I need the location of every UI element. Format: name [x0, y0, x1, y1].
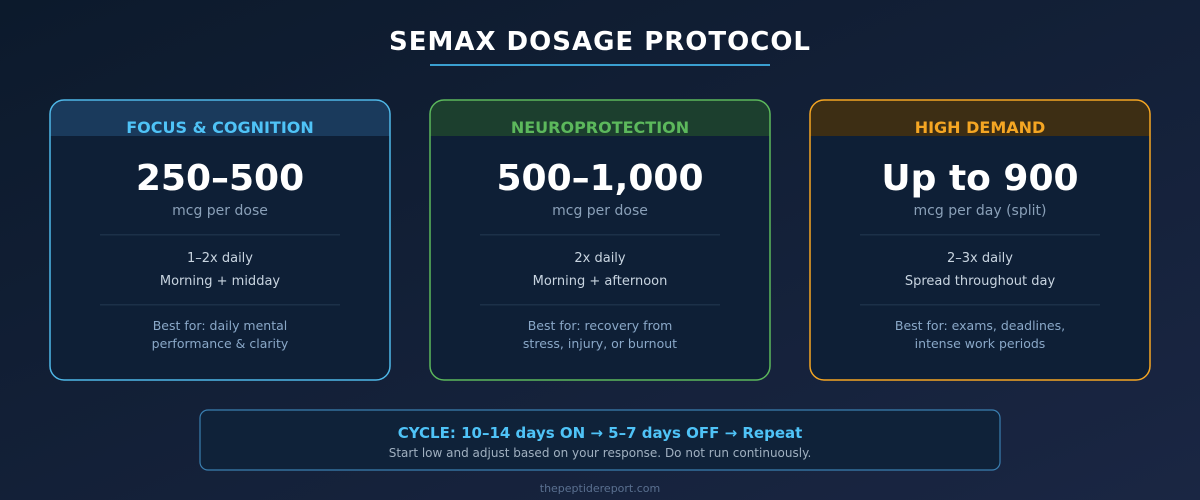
callout: cycle: CYCLE: 10–14 days ON → 5–7 days OFF → Repeat — [398, 424, 802, 442]
panel: neuroprotection: mcg per dose — [552, 203, 648, 219]
panel: neuroprotection: NEUROPROTECTION — [511, 118, 689, 137]
panel: focus & cognition: Morning + midday — [160, 274, 280, 289]
panel: focus & cognition — [50, 100, 390, 380]
panel: high demand: Up to 900 — [881, 158, 1079, 199]
panel: neuroprotection — [430, 100, 770, 380]
panel: neuroprotection: Morning + afternoon — [533, 274, 667, 289]
footer: thepeptidereport.com — [540, 482, 660, 495]
panel: focus & cognition: 1–2x daily — [187, 251, 253, 266]
panel: high demand: 2–3x daily — [947, 251, 1013, 266]
panel: high demand: mcg per day (split) — [914, 203, 1046, 219]
panel: focus & cognition: 250–500 — [136, 158, 304, 199]
panel: neuroprotection: stress, injury, or burnout — [523, 336, 677, 351]
panel: high demand: Spread throughout day — [905, 274, 1055, 289]
panel: neuroprotection: 500–1,000 — [496, 158, 704, 199]
callout: cycle: Start low and adjust based on your response. Do not run continuously. — [389, 446, 811, 460]
panel: focus & cognition: mcg per dose — [172, 203, 268, 219]
panel: neuroprotection: 2x daily — [574, 251, 626, 266]
callout: cycle — [200, 410, 1000, 470]
panel: focus & cognition: FOCUS & COGNITION — [126, 118, 314, 137]
title: SEMAX DOSAGE PROTOCOL — [389, 27, 811, 57]
panel: high demand — [810, 100, 1150, 380]
panel: high demand: Best for: exams, deadlines, — [895, 318, 1065, 333]
panel: high demand: HIGH DEMAND — [915, 118, 1045, 137]
panel: focus & cognition: Best for: daily mental — [153, 318, 287, 333]
panel: neuroprotection: Best for: recovery from — [528, 318, 672, 333]
panel: focus & cognition: performance & clarity — [152, 336, 289, 351]
panel: high demand: intense work periods — [915, 336, 1045, 351]
